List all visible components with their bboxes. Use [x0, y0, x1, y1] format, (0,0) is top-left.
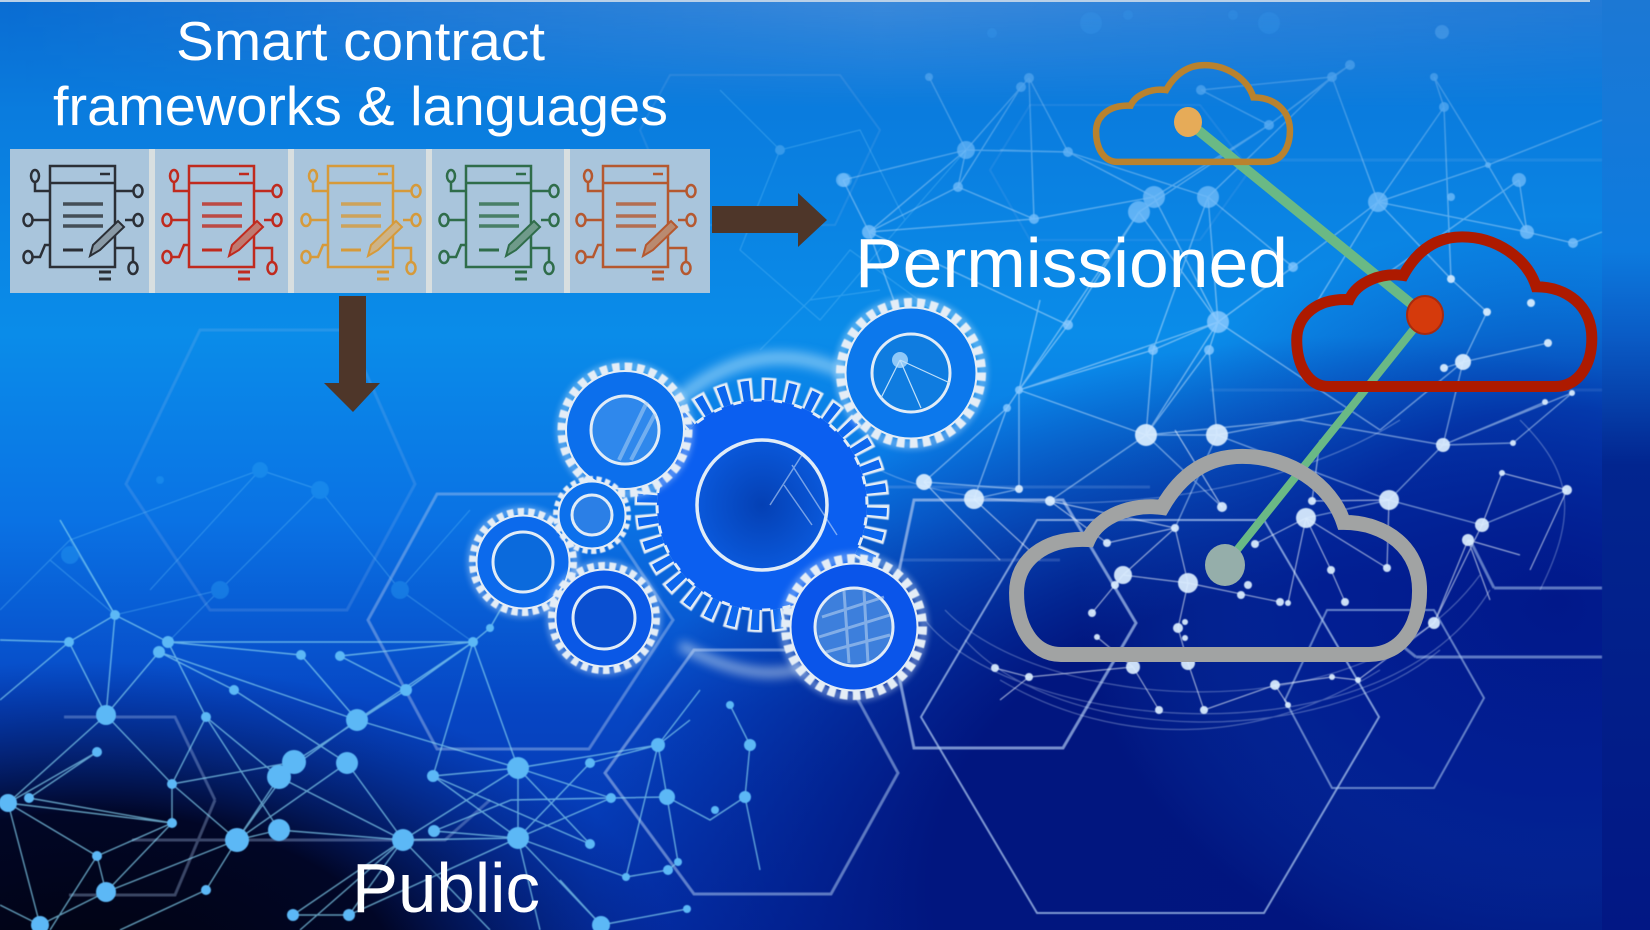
network: faint upper left [0, 90, 966, 642]
network: lower left [0, 520, 760, 930]
cloud: grey [1017, 456, 1420, 654]
icon: red contract [162, 166, 282, 279]
icon: amber contract [302, 166, 420, 279]
icon: black contract [24, 166, 142, 279]
icon: green contract [440, 166, 558, 279]
node: orange [1174, 107, 1202, 137]
node: grey [1205, 544, 1245, 586]
gear glow arcs [672, 358, 860, 673]
arrow: right [712, 193, 827, 247]
label: public: Public [352, 849, 540, 927]
panel: contract icons [10, 149, 710, 293]
heading: smart contract frameworks: frameworks & languages [53, 75, 668, 137]
cloud: orange [1096, 65, 1290, 162]
node: red [1407, 296, 1443, 334]
large central gear [646, 389, 878, 621]
gear bottom right [784, 557, 924, 697]
heading: smart contract frameworks [53, 10, 668, 137]
gear left [471, 510, 575, 614]
small gear [556, 479, 628, 551]
heading: smart contract frameworks: Smart contract [176, 10, 545, 72]
label: permissioned: Permissioned [855, 224, 1288, 302]
gear bottom left [550, 564, 658, 672]
gear top left [561, 366, 689, 494]
gear cluster [471, 301, 983, 697]
cloud: red [1297, 237, 1592, 387]
green connector lines [1188, 122, 1425, 565]
gear top right [839, 301, 983, 445]
arrow: down [324, 296, 380, 412]
network: upper right [836, 10, 1602, 730]
icon: rust contract [576, 166, 696, 279]
